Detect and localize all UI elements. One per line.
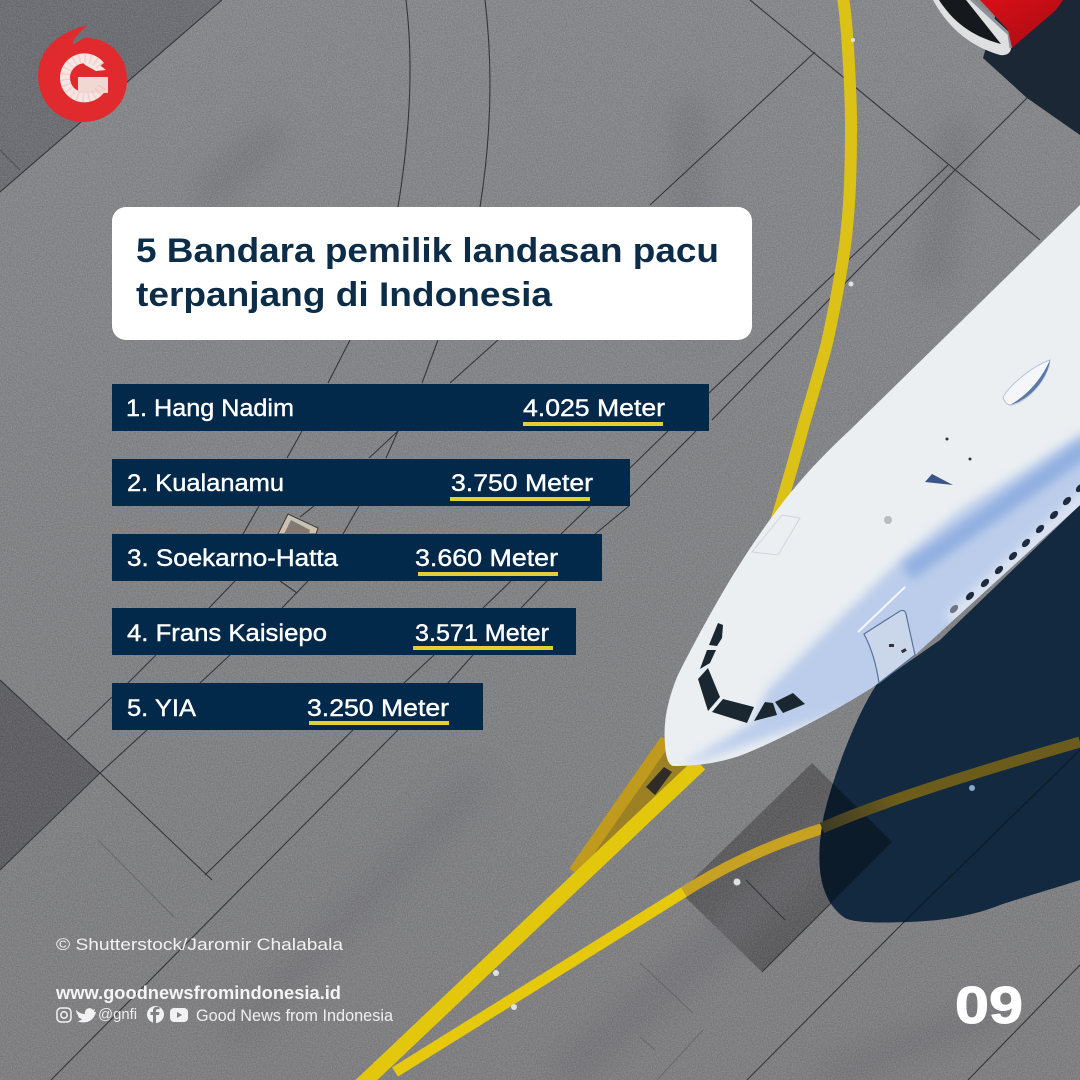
door <box>858 587 915 683</box>
row 4: Frans Kaisiepo <box>112 608 576 655</box>
row 1: Hang Nadim <box>112 384 709 431</box>
icon: twitter <box>76 1008 96 1022</box>
row 5: YIA: 3.250 Meter <box>307 695 449 722</box>
airplane fuselage <box>665 205 1080 768</box>
yellow taxiway lines <box>358 0 855 1080</box>
access hatch <box>278 514 318 534</box>
antenna fairing <box>1003 360 1050 405</box>
icon: youtube <box>170 1008 188 1022</box>
channel name: Good News from Indonesia <box>196 1007 394 1025</box>
website: www.goodnewsfromindonesia.id <box>55 983 341 1003</box>
handle: @gnfi <box>98 1006 137 1023</box>
social row <box>57 1006 394 1025</box>
row 3: Soekarno-Hatta: 3. Soekarno-Hatta <box>127 545 339 572</box>
cabin windows <box>948 482 1080 615</box>
photo credit: © Shutterstock/Jaromir Chalabala <box>56 936 344 954</box>
pavement studs <box>493 38 855 1010</box>
icon: instagram <box>57 1008 71 1022</box>
plane shadow <box>819 505 1080 924</box>
icon: facebook <box>147 1006 164 1023</box>
landing gear at nose <box>646 767 672 795</box>
row 3: Soekarno-Hatta <box>112 534 602 581</box>
cockpit windows <box>698 623 805 723</box>
row 4: Frans Kaisiepo: 3.571 Meter <box>415 620 549 647</box>
row 4: Frans Kaisiepo: 4. Frans Kaisiepo <box>127 620 327 647</box>
title card: 5 Bandara pemilik landasan pacu <box>136 232 719 270</box>
row 5: YIA <box>112 683 483 730</box>
logo <box>38 25 127 122</box>
row 5: YIA: 5. YIA <box>127 695 196 722</box>
title card <box>112 207 752 340</box>
engine: red nacelle <box>933 0 1063 55</box>
small antenna <box>925 474 953 485</box>
title card: terpanjang di Indonesia <box>136 276 553 314</box>
row 1: Hang Nadim: 1. Hang Nadim <box>126 395 294 422</box>
row 2: Kualanamu <box>112 459 630 506</box>
engine shadow <box>983 0 1080 135</box>
row 2: Kualanamu: 2. Kualanamu <box>127 470 284 497</box>
page number: 09 <box>955 977 1023 1035</box>
row 1: Hang Nadim: 4.025 Meter <box>523 395 665 422</box>
blue underside reflection <box>677 428 1080 768</box>
row 2: Kualanamu: 3.750 Meter <box>451 470 593 497</box>
row 3: Soekarno-Hatta: 3.660 Meter <box>415 545 558 572</box>
